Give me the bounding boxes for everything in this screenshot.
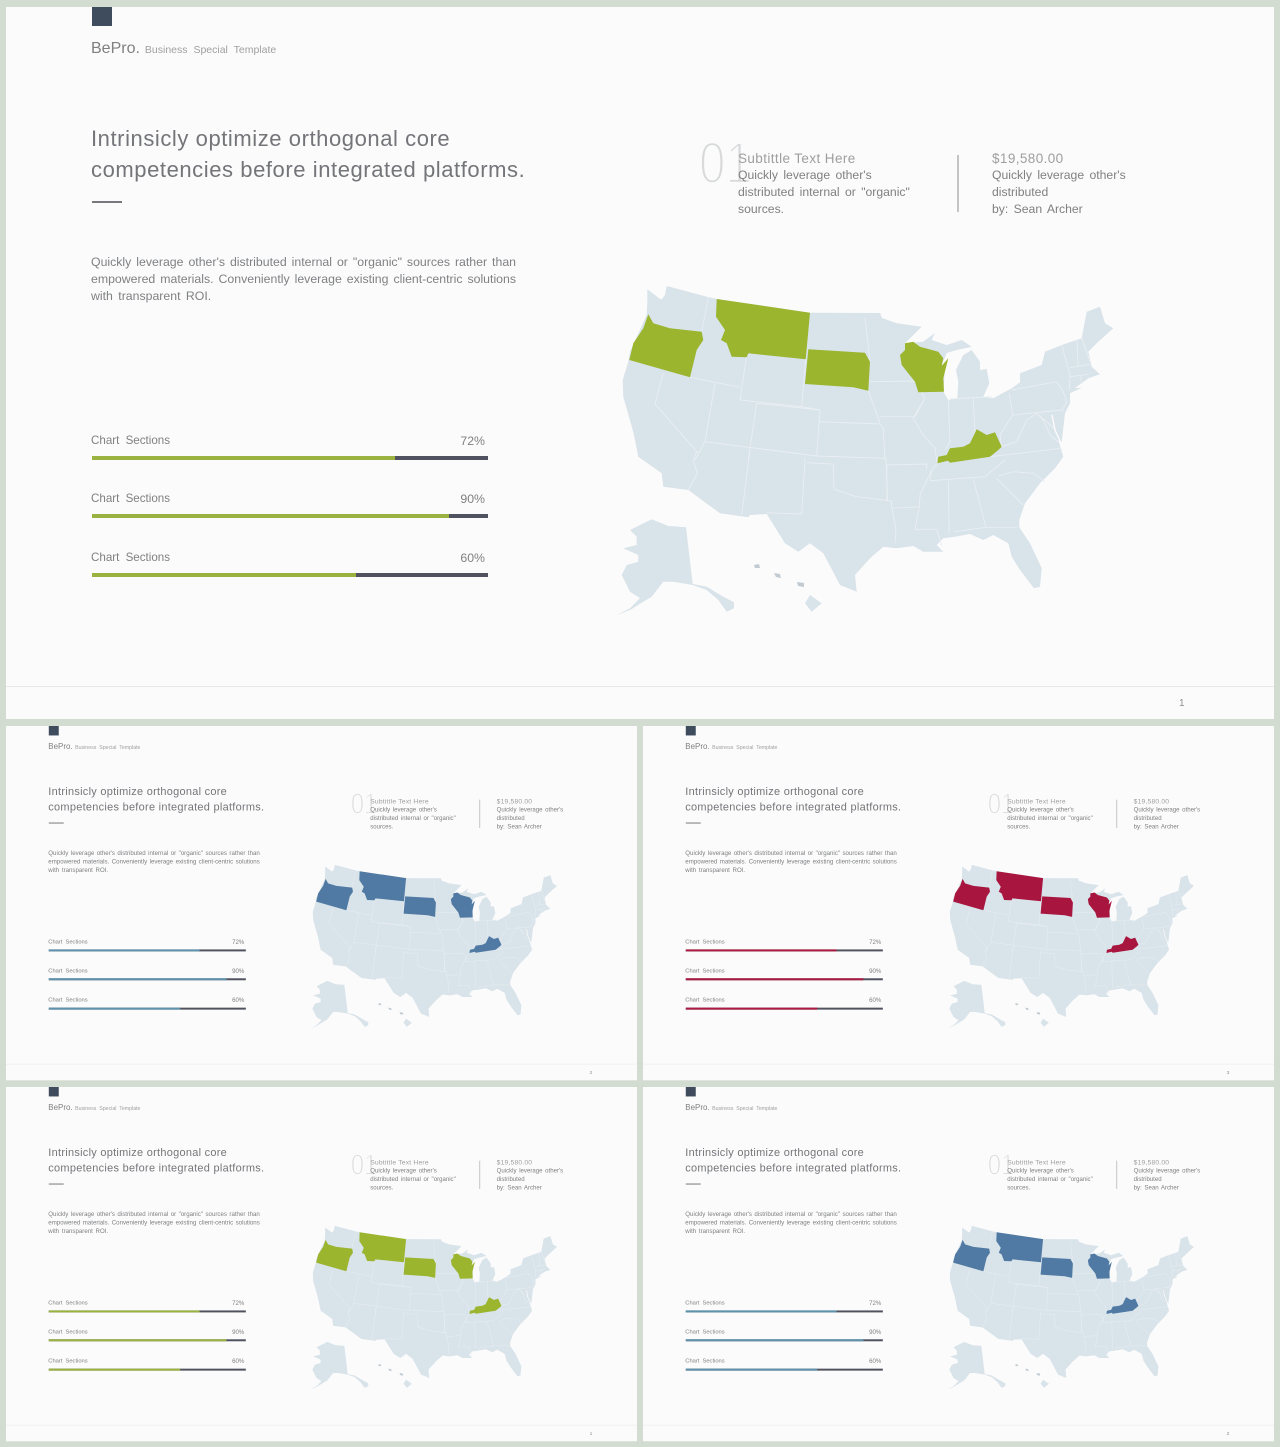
headline rule <box>686 822 701 825</box>
bar label 3: Chart Sections <box>91 551 170 564</box>
price block: distributed <box>497 815 525 822</box>
bar label 1: Chart Sections <box>48 938 88 945</box>
price block: by: Sean Archer <box>1134 823 1179 830</box>
body text <box>685 1210 897 1234</box>
bar 2 <box>686 1339 883 1341</box>
subtitle block: sources. <box>1007 823 1030 830</box>
body text: Quickly leverage other's distributed internal or "organic" sources rather than <box>685 849 897 856</box>
bar 1 <box>49 1310 246 1312</box>
divider <box>1115 1161 1118 1189</box>
body text: empowered materials. Conveniently leverage existing client-centric solutions <box>685 1219 897 1226</box>
subtitle block: distributed internal or "organic" <box>1007 815 1093 822</box>
body text: with transparent ROI. <box>685 1227 745 1234</box>
bar value 1: 72% <box>460 434 485 448</box>
subtitle block: Subtittle Text Here <box>1007 798 1066 805</box>
brand line: BePro.Business Special Template <box>48 742 140 751</box>
logo square <box>686 726 696 735</box>
footer line <box>643 1063 1274 1065</box>
bar label 2: Chart Sections <box>48 1328 88 1335</box>
bar label 1: Chart Sections <box>91 434 170 447</box>
footer line <box>6 686 1274 687</box>
headline: Intrinsicly optimize orthogonal core <box>48 785 227 798</box>
panel: slide green small <box>6 1087 637 1441</box>
divider <box>1115 800 1118 828</box>
price block: Quickly leverage other's <box>497 1167 563 1174</box>
price block: by: Sean Archer <box>992 202 1083 216</box>
headline rule <box>49 1183 64 1186</box>
bar value 1: 72% <box>232 938 244 945</box>
headline <box>91 126 525 182</box>
body text: Quickly leverage other's distributed internal or "organic" sources rather than <box>91 255 516 269</box>
panel: slide red <box>643 726 1274 1080</box>
big number: 01 <box>351 1149 377 1181</box>
headline: Intrinsicly optimize orthogonal core <box>685 1146 864 1159</box>
headline <box>685 1146 901 1174</box>
brand line: BePro.Business Special Template <box>685 1103 777 1112</box>
body text <box>48 849 260 874</box>
subtitle block: Subtittle Text Here <box>738 151 856 166</box>
price block: $19,580.00 <box>992 151 1064 166</box>
bar value 1: 72% <box>232 1299 244 1306</box>
big number: 01 <box>988 788 1014 820</box>
US map with highlighted states <box>311 865 557 1028</box>
price block: by: Sean Archer <box>1134 1184 1179 1191</box>
subtitle block <box>1007 1159 1093 1191</box>
price block: Quickly leverage other's <box>1134 1167 1200 1174</box>
price block <box>992 151 1126 216</box>
bar 1 <box>92 456 488 460</box>
price block <box>1134 798 1200 830</box>
price block: distributed <box>1134 815 1162 822</box>
footer line <box>643 1424 1274 1426</box>
subtitle block: Quickly leverage other's <box>370 1167 437 1174</box>
subtitle block: distributed internal or "organic" <box>370 1176 456 1183</box>
brand line: BePro. Business Special Template <box>91 40 276 57</box>
subtitle block <box>370 798 456 830</box>
subtitle block: sources. <box>738 202 784 216</box>
headline: Intrinsicly optimize orthogonal core <box>91 126 450 151</box>
bar value 3: 60% <box>460 551 485 565</box>
price block <box>496 1159 563 1191</box>
body text <box>91 255 516 303</box>
price block: by: Sean Archer <box>497 823 542 830</box>
body text: Quickly leverage other's distributed internal or "organic" sources rather than <box>48 849 260 856</box>
headline: competencies before integrated platforms. <box>48 1162 264 1174</box>
bar 1 <box>686 1310 883 1312</box>
bar label 2: Chart Sections <box>685 1328 725 1335</box>
headline rule <box>92 201 122 203</box>
bar value 1: 72% <box>869 1299 881 1306</box>
body text: empowered materials. Conveniently leverage existing client-centric solutions <box>91 272 516 286</box>
big number: 01 <box>988 1149 1014 1181</box>
subtitle block <box>738 151 910 216</box>
bar value 1: 72% <box>869 938 881 945</box>
logo square <box>49 726 59 735</box>
bar 1 <box>686 949 883 951</box>
headline: competencies before integrated platforms. <box>685 801 901 813</box>
bar label 1: Chart Sections <box>685 938 725 945</box>
bar 3 <box>686 1369 883 1371</box>
body text: with transparent ROI. <box>685 866 745 873</box>
bar value 2: 90% <box>869 1328 881 1335</box>
bar value 2: 90% <box>232 1328 244 1335</box>
page number: 1 <box>1179 698 1185 709</box>
subtitle block: sources. <box>1007 1184 1030 1191</box>
subtitle block: distributed internal or "organic" <box>370 815 456 822</box>
body text: empowered materials. Conveniently leverage existing client-centric solutions <box>48 858 260 865</box>
headline <box>685 785 901 813</box>
divider <box>478 800 481 828</box>
page number: 2 <box>1227 1431 1229 1436</box>
body text <box>48 1210 260 1234</box>
price block <box>496 798 563 830</box>
subtitle block: distributed internal or "organic" <box>1007 1176 1093 1183</box>
chart: progress bars <box>48 938 246 1010</box>
US map with highlighted states <box>948 865 1194 1028</box>
subtitle block: sources. <box>370 823 393 830</box>
price block: distributed <box>992 185 1048 199</box>
bar 3 <box>686 1008 883 1010</box>
page number: 1 <box>590 1431 592 1436</box>
logo square <box>686 1087 696 1096</box>
bar label 3: Chart Sections <box>685 1358 725 1364</box>
subtitle block: Subtittle Text Here <box>1007 1159 1066 1166</box>
bar label 2: Chart Sections <box>48 967 88 974</box>
bar label 1: Chart Sections <box>685 1299 725 1306</box>
logo square <box>92 7 112 26</box>
subtitle block: distributed internal or "organic" <box>738 185 910 199</box>
headline <box>48 1146 264 1174</box>
body text: Quickly leverage other's distributed internal or "organic" sources rather than <box>685 1210 897 1217</box>
subtitle block: Subtittle Text Here <box>370 798 429 805</box>
panel: slide blue <box>6 726 637 1080</box>
bar value 3: 60% <box>232 1358 244 1365</box>
page number: 3 <box>1227 1070 1229 1075</box>
bar label 3: Chart Sections <box>685 997 725 1003</box>
price block: distributed <box>497 1176 525 1183</box>
bar 3 <box>49 1008 246 1010</box>
bar 3 <box>92 573 488 577</box>
price block <box>1134 1159 1200 1191</box>
bar 2 <box>49 978 246 980</box>
bar label 3: Chart Sections <box>48 997 88 1003</box>
bar 1 <box>49 949 246 951</box>
body text: with transparent ROI. <box>91 289 211 303</box>
price block: distributed <box>1134 1176 1162 1183</box>
headline: Intrinsicly optimize orthogonal core <box>48 1146 227 1159</box>
bar label 2: Chart Sections <box>685 967 725 974</box>
bar value 3: 60% <box>869 997 881 1004</box>
body text <box>685 849 897 874</box>
bar label 3: Chart Sections <box>48 1358 88 1364</box>
bar value 2: 90% <box>460 492 485 506</box>
US map with highlighted states <box>948 1226 1194 1389</box>
bar label 1: Chart Sections <box>48 1299 88 1306</box>
divider <box>478 1161 481 1189</box>
subtitle block: Subtittle Text Here <box>370 1159 429 1166</box>
bar value 2: 90% <box>232 967 244 974</box>
headline: competencies before integrated platforms. <box>91 157 525 182</box>
bar 2 <box>686 978 883 980</box>
big number: 01 <box>351 788 377 820</box>
logo square <box>49 1087 59 1096</box>
headline rule <box>49 822 64 825</box>
subtitle block: Quickly leverage other's <box>738 168 872 182</box>
body text: with transparent ROI. <box>48 866 108 873</box>
chart: progress bars <box>685 1299 883 1371</box>
chart: progress bars <box>48 1299 246 1371</box>
big number: 01 <box>699 131 752 196</box>
chart: progress bars <box>685 938 883 1010</box>
subtitle block: sources. <box>370 1184 393 1191</box>
panel: slide blue small <box>643 1087 1274 1441</box>
bar value 2: 90% <box>869 967 881 974</box>
headline rule <box>686 1183 701 1186</box>
bar value 3: 60% <box>232 997 244 1004</box>
price block: $19,580.00 <box>1134 798 1169 805</box>
subtitle block: Quickly leverage other's <box>1007 1167 1074 1174</box>
price block: Quickly leverage other's <box>1134 806 1200 813</box>
bar 2 <box>49 1339 246 1341</box>
footer line <box>6 1063 637 1065</box>
price block: Quickly leverage other's <box>497 806 563 813</box>
bar value 3: 60% <box>869 1358 881 1365</box>
bar 2 <box>92 514 488 518</box>
US map with highlighted states <box>311 1226 557 1389</box>
subtitle block: Quickly leverage other's <box>1007 806 1074 813</box>
brand line: BePro.Business Special Template <box>48 1103 140 1112</box>
headline: Intrinsicly optimize orthogonal core <box>685 785 864 798</box>
price block: Quickly leverage other's <box>992 168 1126 182</box>
body text: empowered materials. Conveniently leverage existing client-centric solutions <box>48 1219 260 1226</box>
bar label 2: Chart Sections <box>91 492 170 505</box>
price block: by: Sean Archer <box>497 1184 542 1191</box>
price block: $19,580.00 <box>1134 1159 1169 1166</box>
chart: progress bars <box>91 434 488 577</box>
subtitle block <box>370 1159 456 1191</box>
US map with highlighted states <box>618 286 1114 614</box>
body text: with transparent ROI. <box>48 1227 108 1234</box>
divider <box>957 155 959 212</box>
headline <box>48 785 264 813</box>
headline: competencies before integrated platforms. <box>48 801 264 813</box>
subtitle block <box>1007 798 1093 830</box>
body text: empowered materials. Conveniently leverage existing client-centric solutions <box>685 858 897 865</box>
headline: competencies before integrated platforms. <box>685 1162 901 1174</box>
footer line <box>6 1424 637 1426</box>
panel: main slide green <box>6 7 1274 719</box>
page number: 2 <box>590 1070 592 1075</box>
price block: $19,580.00 <box>497 1159 532 1166</box>
bar 3 <box>49 1369 246 1371</box>
brand line: BePro.Business Special Template <box>685 742 777 751</box>
subtitle block: Quickly leverage other's <box>370 806 437 813</box>
body text: Quickly leverage other's distributed internal or "organic" sources rather than <box>48 1210 260 1217</box>
price block: $19,580.00 <box>497 798 532 805</box>
